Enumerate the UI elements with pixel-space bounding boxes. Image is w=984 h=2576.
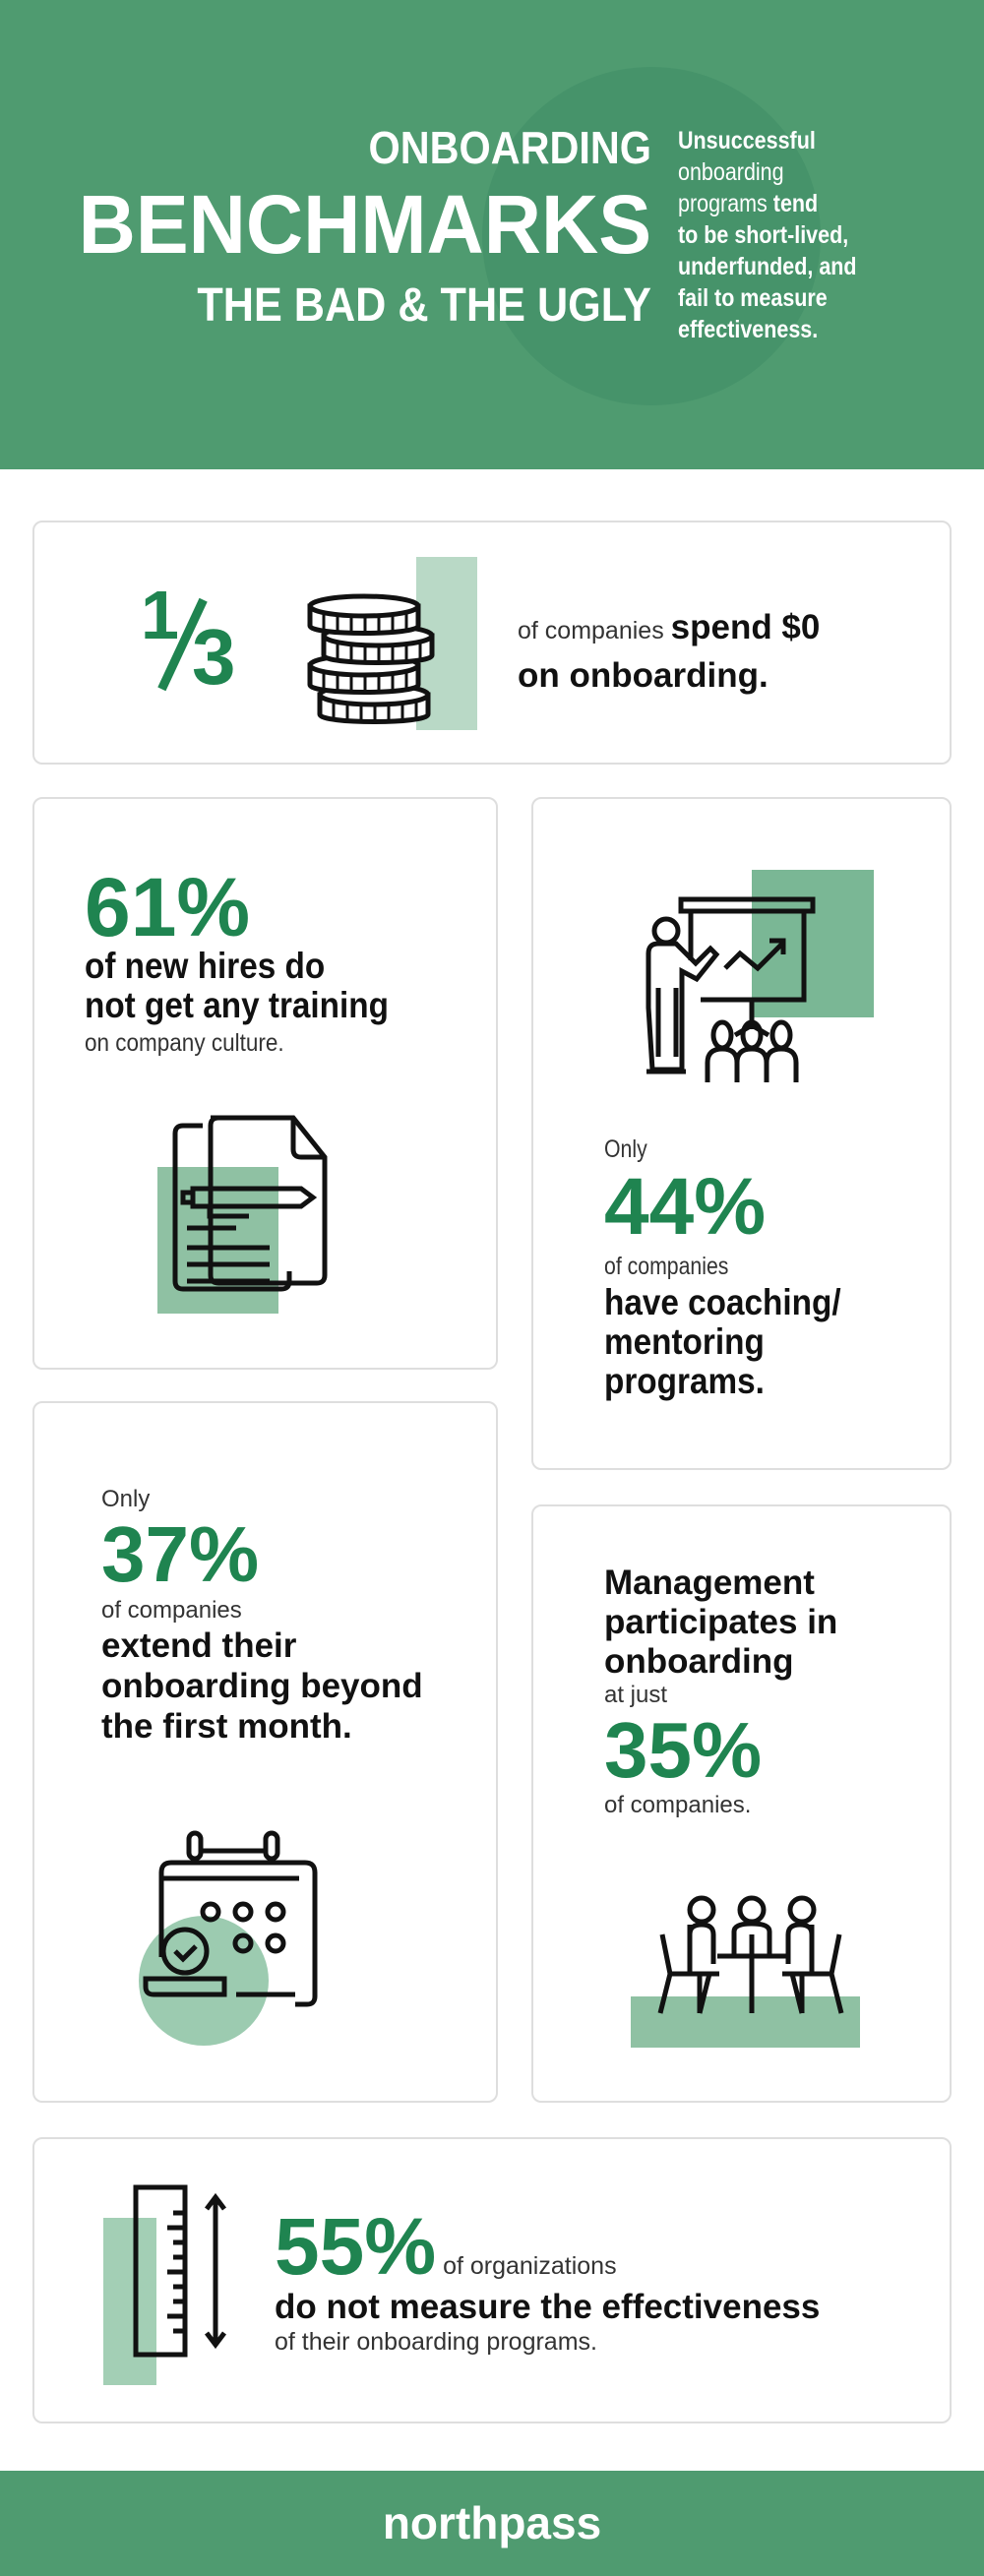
header band: [0, 0, 984, 469]
text: 55%: [275, 2202, 820, 2356]
text: on company culture.: [85, 1029, 284, 1057]
intro text: effectiveness.: [678, 316, 818, 343]
intro text: to be short-lived,: [678, 221, 848, 249]
icon: coins: [307, 557, 477, 730]
logo: northpass: northpass: [383, 2497, 601, 2548]
text: [85, 946, 389, 1057]
intro text: [678, 127, 857, 343]
text: management 35%: 35%: [604, 1706, 762, 1794]
text: only 37%: 37%: [101, 1510, 259, 1598]
text: only 44%: mentoring: [604, 1321, 765, 1362]
text: spend $0: on onboarding.: [518, 656, 769, 695]
text: management 35%: participates in: [604, 1603, 837, 1641]
text: only 37%: onboarding beyond: [101, 1667, 423, 1705]
stat: 1/3: 3: [192, 613, 236, 701]
text: 55%: 55% of organizations: [275, 2202, 617, 2292]
intro text: programs tend: [678, 190, 818, 217]
intro text: fail to measure: [678, 284, 828, 312]
text: only 37%: Only: [101, 1486, 150, 1512]
panel: one third spend $0: [32, 521, 952, 765]
icon: meeting: [631, 1895, 860, 2048]
icon: calendar: [139, 1830, 317, 2046]
text: 55%: do not measure the effectiveness: [275, 2288, 820, 2326]
text: only 44%: 44%: [604, 1162, 766, 1252]
text: only 44%: [604, 1135, 841, 1401]
text: spend $0: [518, 608, 820, 695]
intro text: underfunded, and: [678, 253, 857, 280]
text: management 35%: Management: [604, 1564, 815, 1602]
text: management 35%: onboarding: [604, 1642, 793, 1681]
text: of new hires do: [85, 946, 325, 986]
text: only 37%: of companies: [101, 1597, 242, 1624]
stat: 1/3: 1: [141, 577, 179, 653]
text: 55%: of their onboarding programs.: [275, 2328, 597, 2356]
stat: 61%: 61%: [85, 861, 250, 953]
icon: document: [157, 1116, 327, 1314]
intro text: onboarding: [678, 158, 784, 186]
icon: presenter: [646, 870, 874, 1082]
decorative circle: [482, 67, 821, 405]
text: management 35%: at just: [604, 1682, 667, 1708]
text: spend $0: of companies spend $0: [518, 608, 820, 646]
text: only 37%: extend their: [101, 1626, 296, 1665]
text: only 37%: [101, 1486, 423, 1746]
text: only 44%: of companies: [604, 1253, 728, 1280]
text: management 35%: of companies.: [604, 1792, 751, 1818]
panel: 61% training: [32, 797, 498, 1370]
title: THE BAD & THE UGLY: [197, 279, 651, 332]
text: not get any training: [85, 985, 389, 1025]
panel: 44% coaching: [531, 797, 952, 1470]
panel: 35% management: [531, 1504, 952, 2103]
text: management 35%: [604, 1564, 837, 1818]
title: ONBOARDING: [368, 122, 651, 173]
intro text: Unsuccessful: [678, 127, 816, 154]
icon: ruler: [103, 2184, 226, 2385]
title: [79, 122, 651, 332]
panel: 37% extend: [32, 1401, 498, 2103]
stat: 1/3: [141, 577, 236, 701]
footer: [0, 2471, 984, 2576]
panel: 55% measure: [32, 2137, 952, 2423]
title: BENCHMARKS: [79, 178, 651, 271]
text: only 37%: the first month.: [101, 1707, 352, 1746]
text: only 44%: Only: [604, 1135, 647, 1163]
text: only 44%: programs.: [604, 1361, 765, 1401]
text: only 44%: have coaching/: [604, 1282, 841, 1322]
